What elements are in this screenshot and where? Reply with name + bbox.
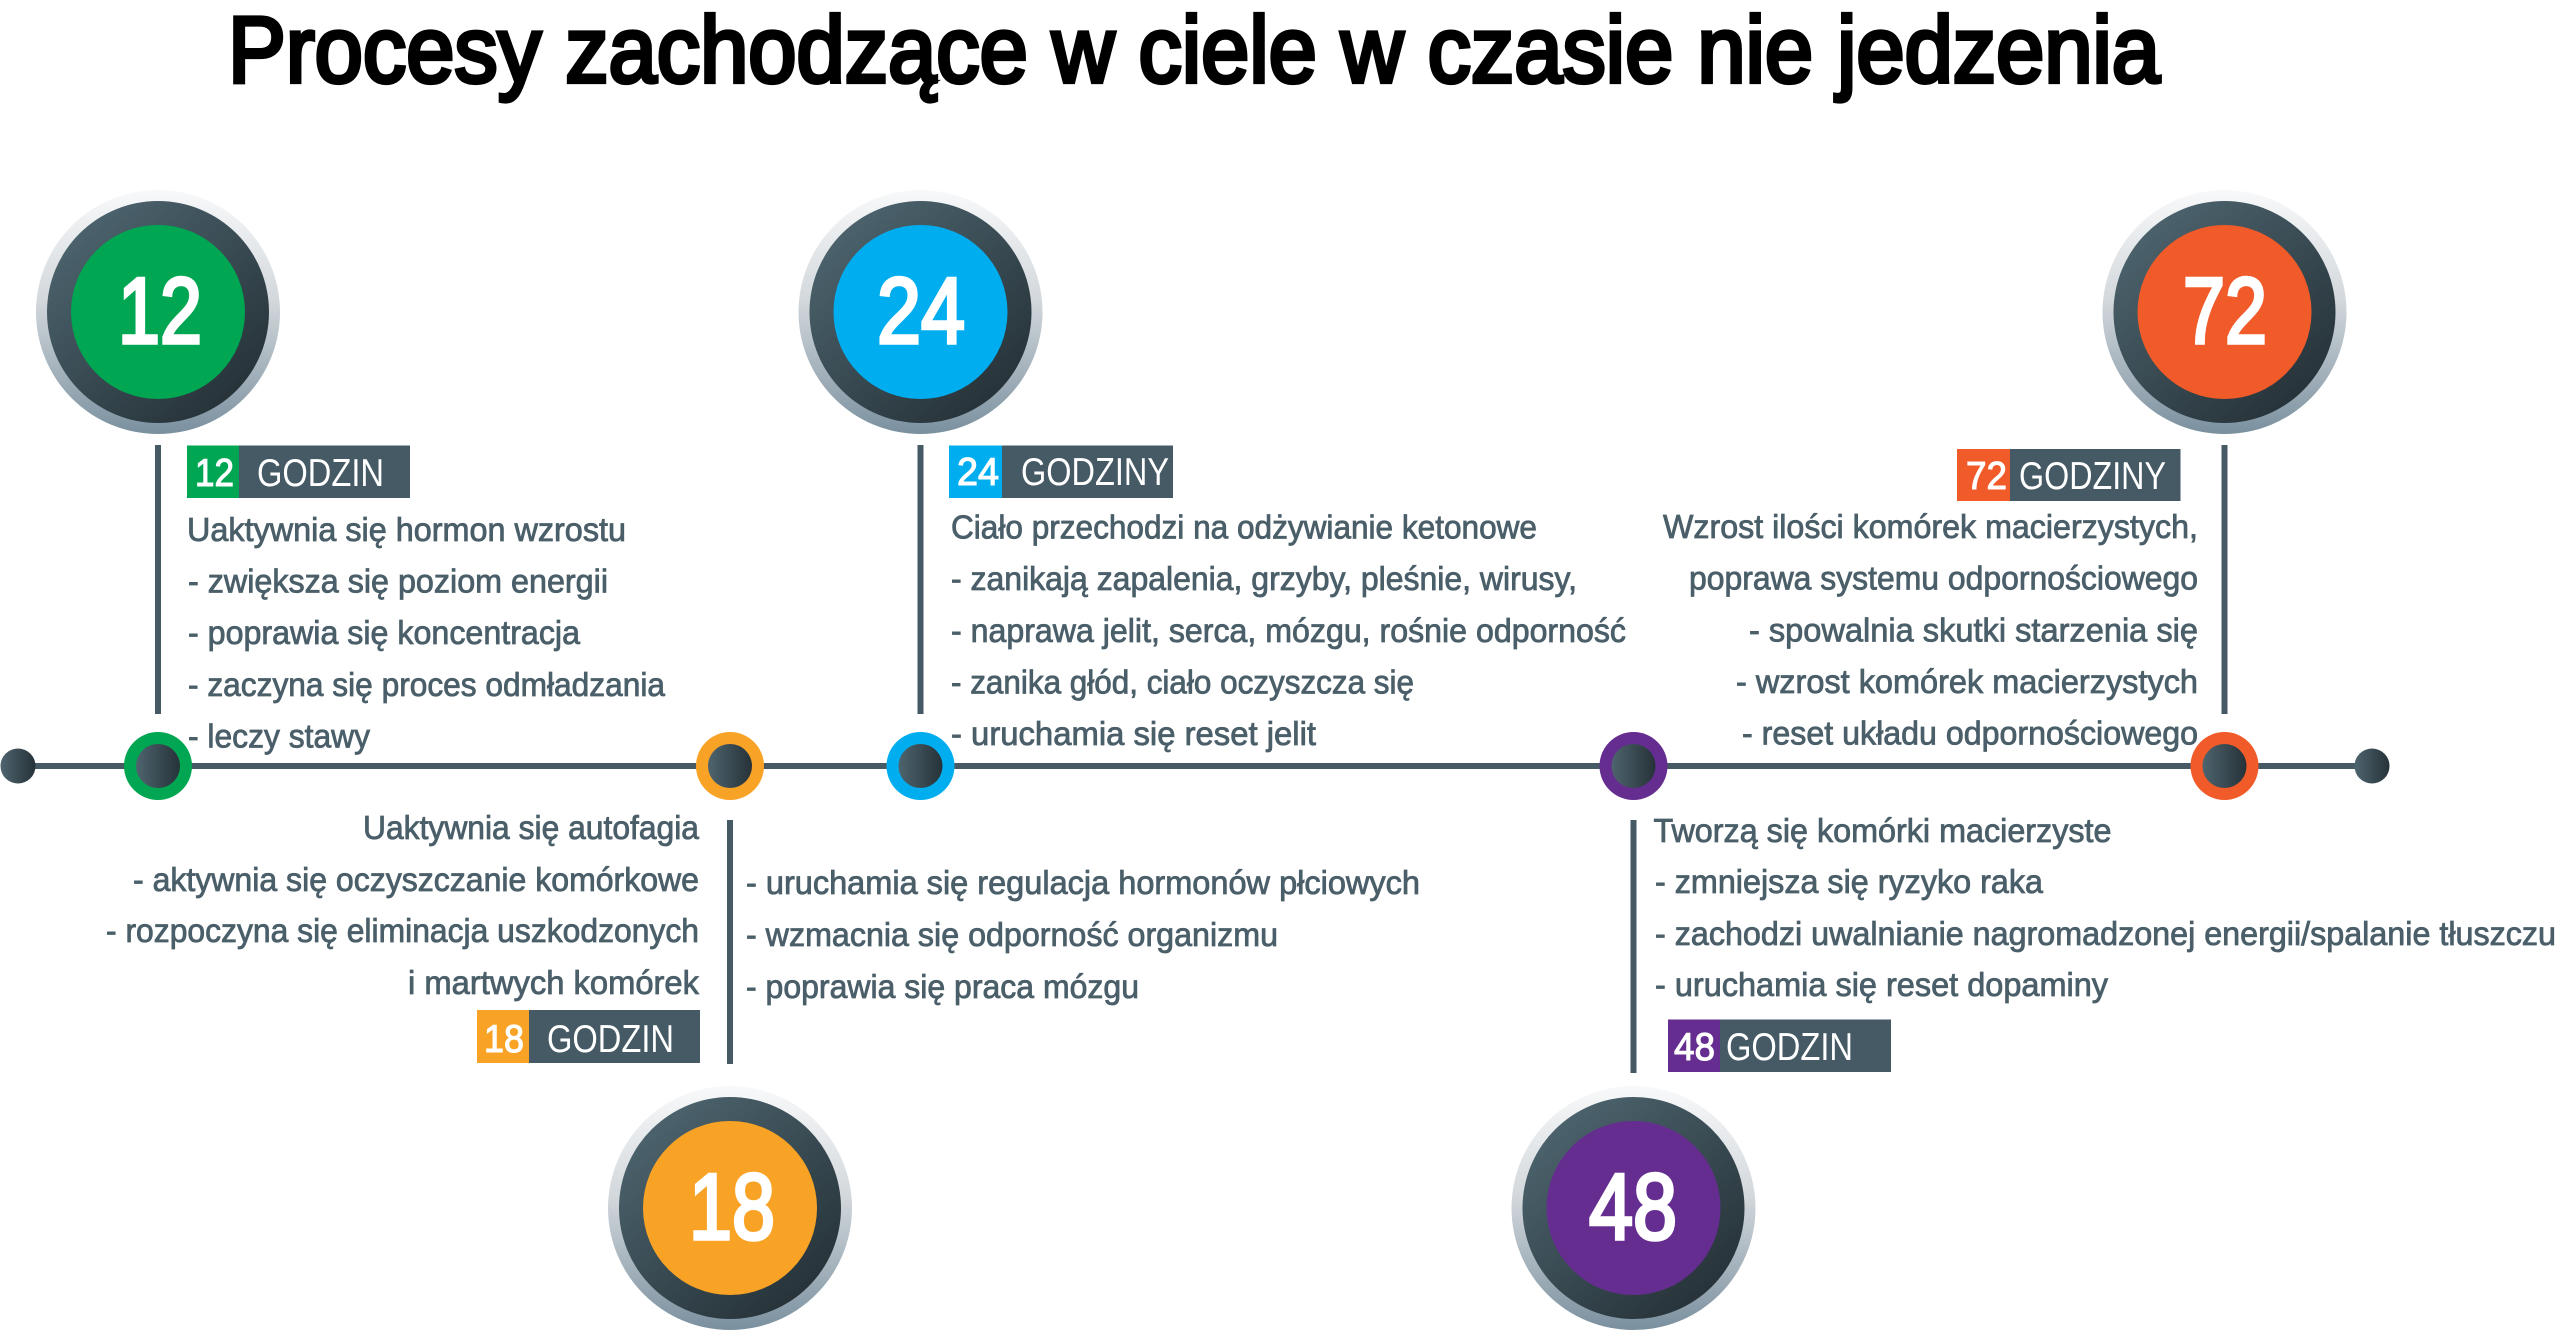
text block: 24 godziny xyxy=(951,508,1626,752)
text block: 24 godziny: - naprawa jelit, serca, mózgu, rośnie odporność xyxy=(951,612,1626,649)
icon: circle 72 xyxy=(2102,190,2346,434)
text block: 72 godziny: - reset układu odpornościowego xyxy=(1742,714,2198,752)
badge: 72 godziny: GODZINY xyxy=(2019,455,2166,498)
text block: 18 godzin left: Uaktywnia się autofagia xyxy=(363,809,700,846)
text block: 12 godzin: - poprawia się koncentracja xyxy=(188,614,581,651)
badge: 24 godziny xyxy=(949,446,1173,498)
text block: 24 godziny: Ciało przechodzi na odżywianie ketonowe xyxy=(951,508,1537,546)
connector xyxy=(727,820,733,1064)
timeline xyxy=(0,732,2390,800)
text block: 18 godzin right: - uruchamia się regulacja hormonów płciowych xyxy=(746,864,1420,901)
connector xyxy=(2222,445,2228,714)
panel: 48 godzin xyxy=(1512,812,2556,1330)
badge: 18 godzin: GODZIN xyxy=(547,1018,674,1061)
marker: 12 xyxy=(124,732,192,800)
text block: 18 godzin left: - aktywnia się oczyszczanie komórkowe xyxy=(133,861,699,898)
text block: 48 godzin: - zmniejsza się ryzyko raka xyxy=(1655,863,2044,900)
text block: 24 godziny: - zanika głód, ciało oczyszcza się xyxy=(951,664,1414,700)
badge: 12 godzin xyxy=(187,446,410,498)
text block: 48 godzin: - uruchamia się reset dopaminy xyxy=(1655,966,2108,1003)
icon: circle 24 xyxy=(798,190,1042,434)
badge: 18 godzin xyxy=(477,1010,700,1063)
icon: circle 12: 12 xyxy=(118,258,202,363)
timeline end dot xyxy=(2354,748,2390,784)
marker: 48 xyxy=(1600,732,1668,800)
text block: 12 godzin: - leczy stawy xyxy=(188,718,370,754)
title: Procesy zachodzące w ciele w czasie nie jedzenia xyxy=(228,0,2161,102)
text block: 18 godzin left xyxy=(106,809,700,1001)
connector xyxy=(1630,820,1636,1073)
badge: 18 godzin: 18 xyxy=(484,1018,524,1061)
text block: 72 godziny xyxy=(1663,508,2198,752)
icon: circle 48: 48 xyxy=(1589,1154,1677,1259)
panel: 18 godzin xyxy=(106,809,1420,1330)
badge: 24 godziny: 24 xyxy=(957,451,999,494)
text block: 12 godzin xyxy=(187,511,666,754)
icon: circle 48 xyxy=(1512,1086,1756,1330)
text block: 72 godziny: - wzrost komórek macierzystych xyxy=(1736,663,2198,700)
icon: circle 12 xyxy=(36,190,280,434)
text block: 24 godziny: - zanikają zapalenia, grzyby, pleśnie, wirusy, xyxy=(951,560,1577,597)
text block: 18 godzin right: - poprawia się praca mózgu xyxy=(746,968,1139,1005)
badge: 12 godzin: GODZIN xyxy=(257,452,384,495)
connector xyxy=(155,445,161,714)
icon: circle 24: 24 xyxy=(877,258,965,363)
badge: 72 godziny: 72 xyxy=(1966,455,2007,498)
text block: 12 godzin: - zwiększa się poziom energii xyxy=(188,562,608,600)
text block: 18 godzin right xyxy=(746,864,1420,1005)
icon: circle 18: 18 xyxy=(689,1154,775,1259)
text block: 18 godzin left: - rozpoczyna się eliminacja uszkodzonych xyxy=(106,912,699,949)
text block: 12 godzin: - zaczyna się proces odmładzania xyxy=(188,666,666,703)
marker: 18 xyxy=(696,732,764,800)
panel: 72 godziny xyxy=(1663,190,2346,752)
text block: 24 godziny: - uruchamia się reset jelit xyxy=(951,715,1316,752)
badge: 12 godzin: 12 xyxy=(195,452,234,495)
panel: 12 godzin xyxy=(36,190,666,754)
panel: 24 godziny xyxy=(798,190,1626,752)
text block: 48 godzin: Tworzą się komórki macierzyste xyxy=(1654,812,2112,849)
timeline start dot xyxy=(0,748,36,784)
text block: 48 godzin: - zachodzi uwalnianie nagromadzonej energii/spalanie tłuszczu xyxy=(1655,915,2556,952)
text block: 72 godziny: poprawa systemu odpornościowego xyxy=(1689,560,2198,596)
icon: circle 18 xyxy=(608,1086,852,1330)
text block: 72 godziny: Wzrost ilości komórek macierzystych, xyxy=(1663,508,2198,545)
text block: 12 godzin: Uaktywnia się hormon wzrostu xyxy=(187,511,626,548)
icon: circle 72: 72 xyxy=(2183,258,2267,363)
badge: 72 godziny xyxy=(1957,449,2180,501)
badge: 48 godzin xyxy=(1668,1020,1891,1072)
marker: 72 xyxy=(2190,732,2258,800)
text block: 48 godzin xyxy=(1654,812,2556,1003)
badge: 48 godzin: GODZIN xyxy=(1726,1026,1853,1069)
marker: 24 xyxy=(886,732,954,800)
text block: 72 godziny: - spowalnia skutki starzenia się xyxy=(1749,612,2198,648)
connector xyxy=(918,445,924,714)
text block: 18 godzin right: - wzmacnia się odporność organizmu xyxy=(746,916,1278,953)
text block: 18 godzin left: i martwych komórek xyxy=(408,964,699,1001)
badge: 48 godzin: 48 xyxy=(1674,1026,1715,1069)
badge: 24 godziny: GODZINY xyxy=(1021,451,1169,494)
